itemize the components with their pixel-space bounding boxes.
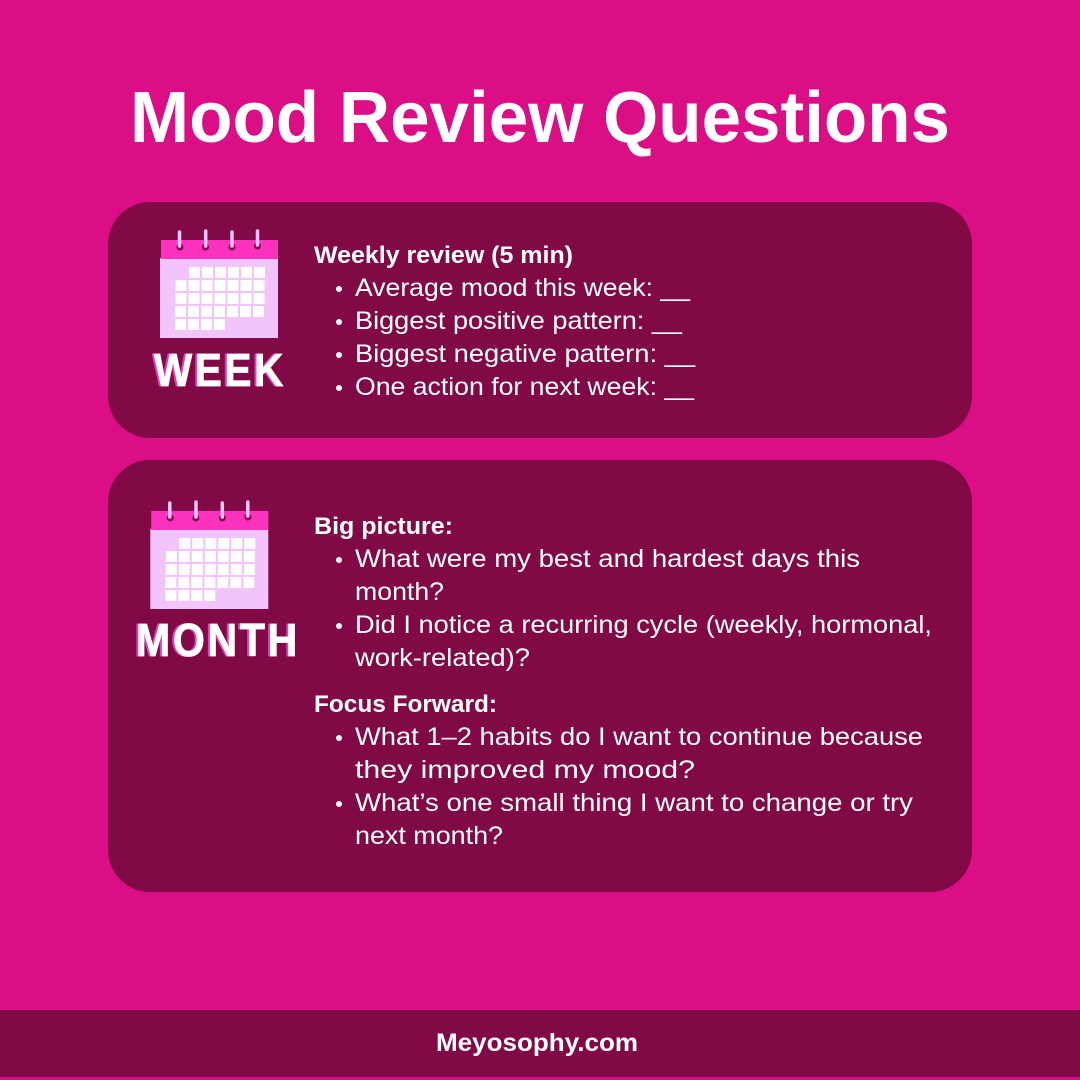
text block: focus forward: Focus Forward: — [314, 691, 497, 718]
text block: weekly review: Weekly review (5 min) — [314, 242, 573, 269]
label: week: WEEK — [154, 344, 286, 396]
text block: big picture — [314, 513, 932, 672]
text block: big picture: What were my best and hardest days this — [355, 545, 860, 573]
text block: focus forward: they improved my mood? — [355, 756, 695, 784]
text block: big picture: Big picture: — [314, 513, 453, 540]
text block: focus forward: What 1–2 habits do I want to continue because — [355, 723, 923, 751]
text block: big picture: Did I notice a recurring cycle (weekly, hormonal, — [355, 611, 932, 639]
text block: focus forward: What’s one small thing I want to change or try — [355, 789, 914, 817]
text block: weekly review: Average mood this week: __ — [355, 274, 691, 302]
text block: weekly review: Biggest negative pattern: __ — [355, 340, 696, 368]
text block: weekly review: One action for next week: __ — [355, 373, 695, 401]
text block: big picture: month? — [355, 578, 444, 606]
text block: weekly review — [314, 242, 696, 401]
text block: weekly review: Biggest positive pattern: __ — [355, 307, 683, 335]
icon: month calendar — [150, 502, 268, 609]
panel: monthly review — [108, 460, 972, 892]
footer bar — [0, 1010, 1080, 1077]
icon: week calendar — [160, 231, 278, 338]
footer text: Meyosophy.com — [436, 1029, 638, 1057]
panel: weekly review — [108, 202, 972, 438]
text block: focus forward: next month? — [355, 822, 503, 850]
text block: big picture: work-related)? — [354, 644, 530, 672]
label: month: MONTH — [136, 614, 300, 666]
text block: focus forward — [314, 691, 923, 850]
title: Mood Review Questions — [130, 78, 950, 158]
